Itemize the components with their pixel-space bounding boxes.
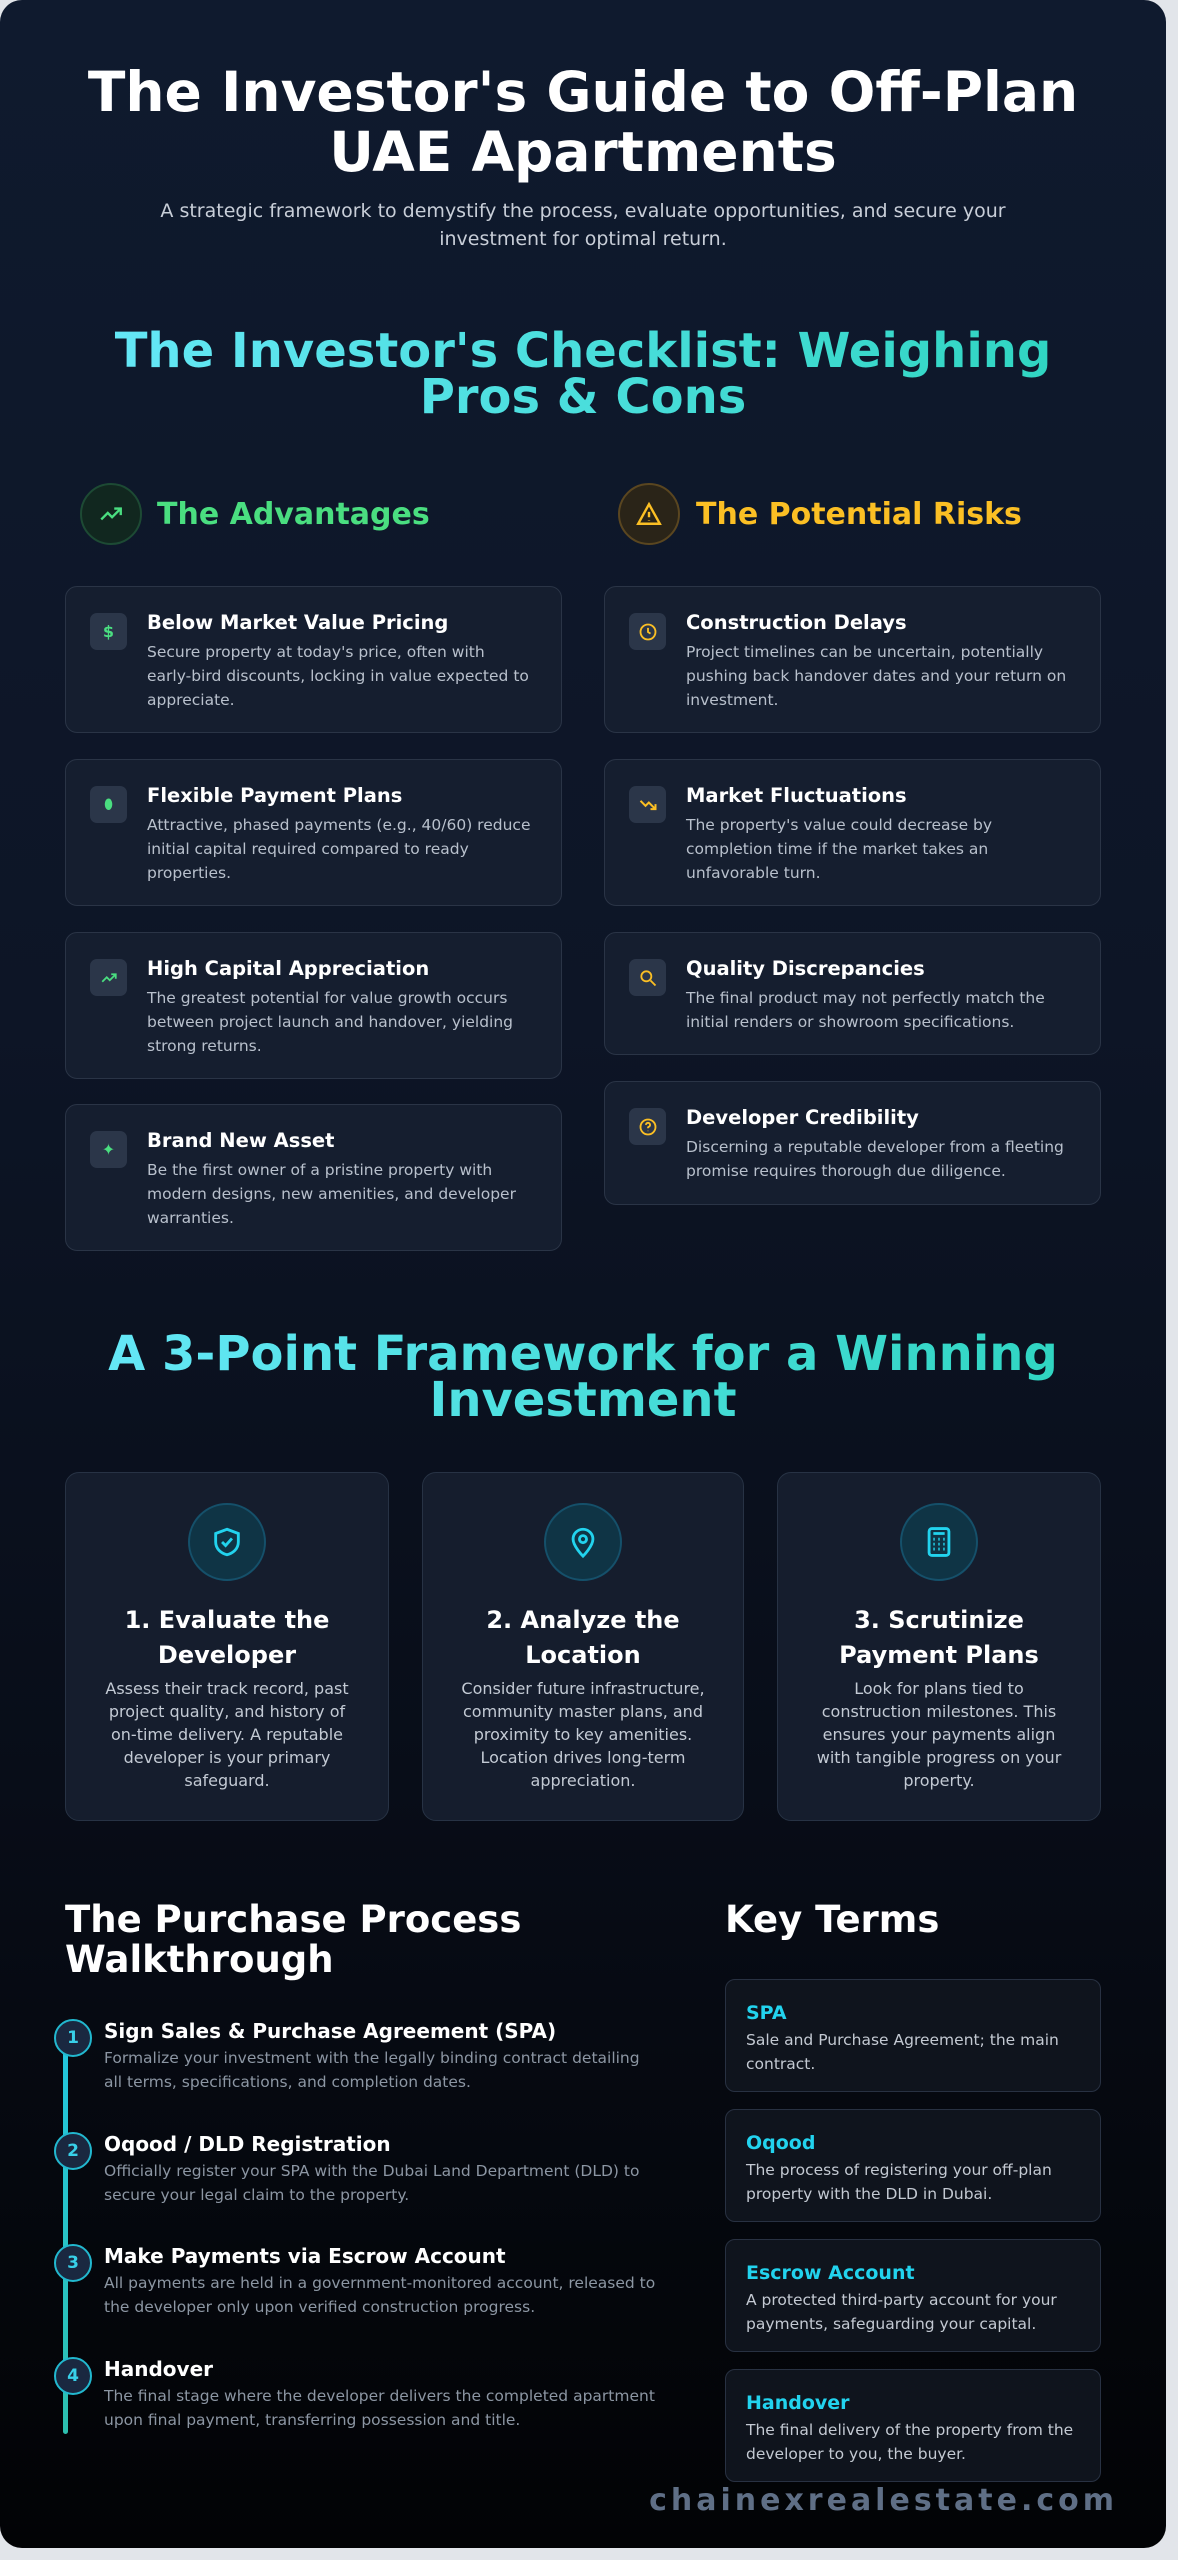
term: Handover: Handover [746,2392,850,2414]
step 4: 4 [67,2366,79,2386]
card: quality: The final product may not perfectly match the initial renders or showroom specifications. [686,989,1045,1031]
heading: key terms: Key Terms [725,1898,939,1941]
timeline [63,2054,68,2434]
term: Handover [725,2369,1101,2482]
heading: checklist: The Investor's Checklist: Weighing [115,323,1051,379]
card: fluctuations [604,759,1101,906]
card: analyze location [422,1472,744,1821]
step 3: 3 [67,2253,79,2273]
heading: purchase process: Walkthrough [65,1938,334,1981]
card: quality: Quality Discrepancies [686,957,925,980]
heading: framework: Investment [429,1372,737,1428]
heading: purchase process [65,1898,521,1981]
card: analyze location: Location [525,1641,641,1669]
card: below market: $ [103,622,114,641]
footer brand: chainexrealestate.com [649,2483,1118,2518]
step 4: Handover [104,2357,213,2381]
card: below market: Below Market Value Pricing [147,611,448,634]
term: SPA: SPA [746,2002,787,2024]
title: The Investor's Guide to Off-Plan [88,60,1078,124]
step 1: Formalize your investment with the legally binding contract detailing all terms, specifications, and completion dates. [104,2049,640,2091]
header: risks: The Potential Risks [696,497,1022,532]
card: evaluate developer [65,1472,389,1821]
card: flexible payment: Flexible Payment Plans [147,784,402,807]
term: Escrow: Escrow Account [746,2262,915,2284]
term: Oqood: The process of registering your off-plan property with the DLD in Dubai. [746,2161,1052,2203]
title: UAE Apartments [329,120,837,184]
step 3: All payments are held in a government-monitored account, released to the developer only upon verified construction progress. [104,2274,655,2316]
step 3 [54,2244,655,2316]
step 2: Oqood / DLD Registration [104,2132,391,2156]
card: flexible payment: Attractive, phased payments (e.g., 40/60) reduce initial capital required compared to ready properties. [147,816,530,882]
heading: framework [60,1331,1106,1423]
card: below market: Secure property at today's price, often with early-bird discounts, locking in value expected to appreciate. [147,643,529,709]
card: capital appreciation [65,932,562,1079]
card: delays: Project timelines can be uncertain, potentially pushing back handover dates and your return on investment. [686,643,1066,709]
heading: framework: A 3-Point Framework for a Winning [108,1326,1058,1382]
step 4: The final stage where the developer delivers the completed apartment upon final payment, transferring possession and title. [104,2387,655,2429]
title [88,60,1078,184]
header: advantages: The Advantages [157,497,430,532]
card: fluctuations: Market Fluctuations [686,784,907,807]
step 1: 1 [67,2028,79,2048]
card: analyze location: 2. Analyze the [486,1606,680,1634]
card: brand new: Brand New Asset [147,1129,334,1152]
card: payment plans: Look for plans tied to construction milestones. This ensures your payments align with tangible progress on your property. [817,1679,1061,1790]
card: payment plans: Payment Plans [839,1641,1039,1669]
card: flexible payment: ⬮ [104,796,113,812]
term: Handover: The final delivery of the property from the developer to you, the buyer. [746,2421,1073,2463]
term: Oqood: Oqood [746,2132,815,2154]
heading: checklist [60,328,1106,420]
term: Escrow [725,2239,1101,2352]
card: brand new [65,1104,562,1251]
step 3: Make Payments via Escrow Account [104,2244,506,2268]
card: payment plans [777,1472,1101,1821]
card: evaluate developer: 1. Evaluate the [125,1606,329,1634]
term: SPA: Sale and Purchase Agreement; the main contract. [746,2031,1059,2073]
step 2 [54,2132,639,2204]
header: advantages [80,483,430,545]
card: payment plans: 3. Scrutinize [854,1606,1024,1634]
card: credibility: Discerning a reputable developer from a fleeting promise requires thorough due diligence. [686,1138,1064,1180]
card: credibility: Developer Credibility [686,1106,919,1129]
card: brand new: ✦ [102,1140,115,1159]
step 1: Sign Sales & Purchase Agreement (SPA) [104,2019,556,2043]
header: risks [618,483,1022,545]
card: capital appreciation: High Capital Appreciation [147,957,429,980]
card: evaluate developer: Developer [158,1641,296,1669]
card: fluctuations: The property's value could decrease by completion time if the market takes an unfavorable turn. [686,816,992,882]
step 2: Officially register your SPA with the Dubai Land Department (DLD) to secure your legal claim to the property. [104,2162,639,2204]
card: analyze location: Consider future infrastructure, community master plans, and proximity to key amenities. Location drives long-term appreciation. [461,1679,705,1790]
term: Oqood [725,2109,1101,2222]
card: quality [604,932,1101,1055]
term: Escrow: A protected third-party account for your payments, safeguarding your capital. [746,2291,1057,2333]
card: credibility [604,1081,1101,1205]
card: delays: Construction Delays [686,611,907,634]
subtitle: A strategic framework to demystify the process, evaluate opportunities, and secure your investment for optimal return. [160,200,1006,250]
card: evaluate developer: Assess their track record, past project quality, and history of on-time delivery. A reputable developer is your primary safeguard. [105,1679,349,1790]
card: brand new: Be the first owner of a pristine property with modern designs, new amenities, and developer warranties. [147,1161,516,1227]
term: SPA [725,1979,1101,2092]
card: capital appreciation: The greatest potential for value growth occurs between project launch and handover, yielding strong returns. [147,989,513,1055]
card: flexible payment [65,759,562,906]
card: delays [604,586,1101,733]
step 1 [54,2019,640,2091]
icon: warning [618,483,680,545]
card: below market [65,586,562,733]
heading: purchase process: The Purchase Process [65,1898,521,1941]
step 2: 2 [67,2141,79,2161]
step 4 [54,2357,655,2429]
icon: trend up [80,483,142,545]
heading: checklist: Pros & Cons [420,369,746,425]
